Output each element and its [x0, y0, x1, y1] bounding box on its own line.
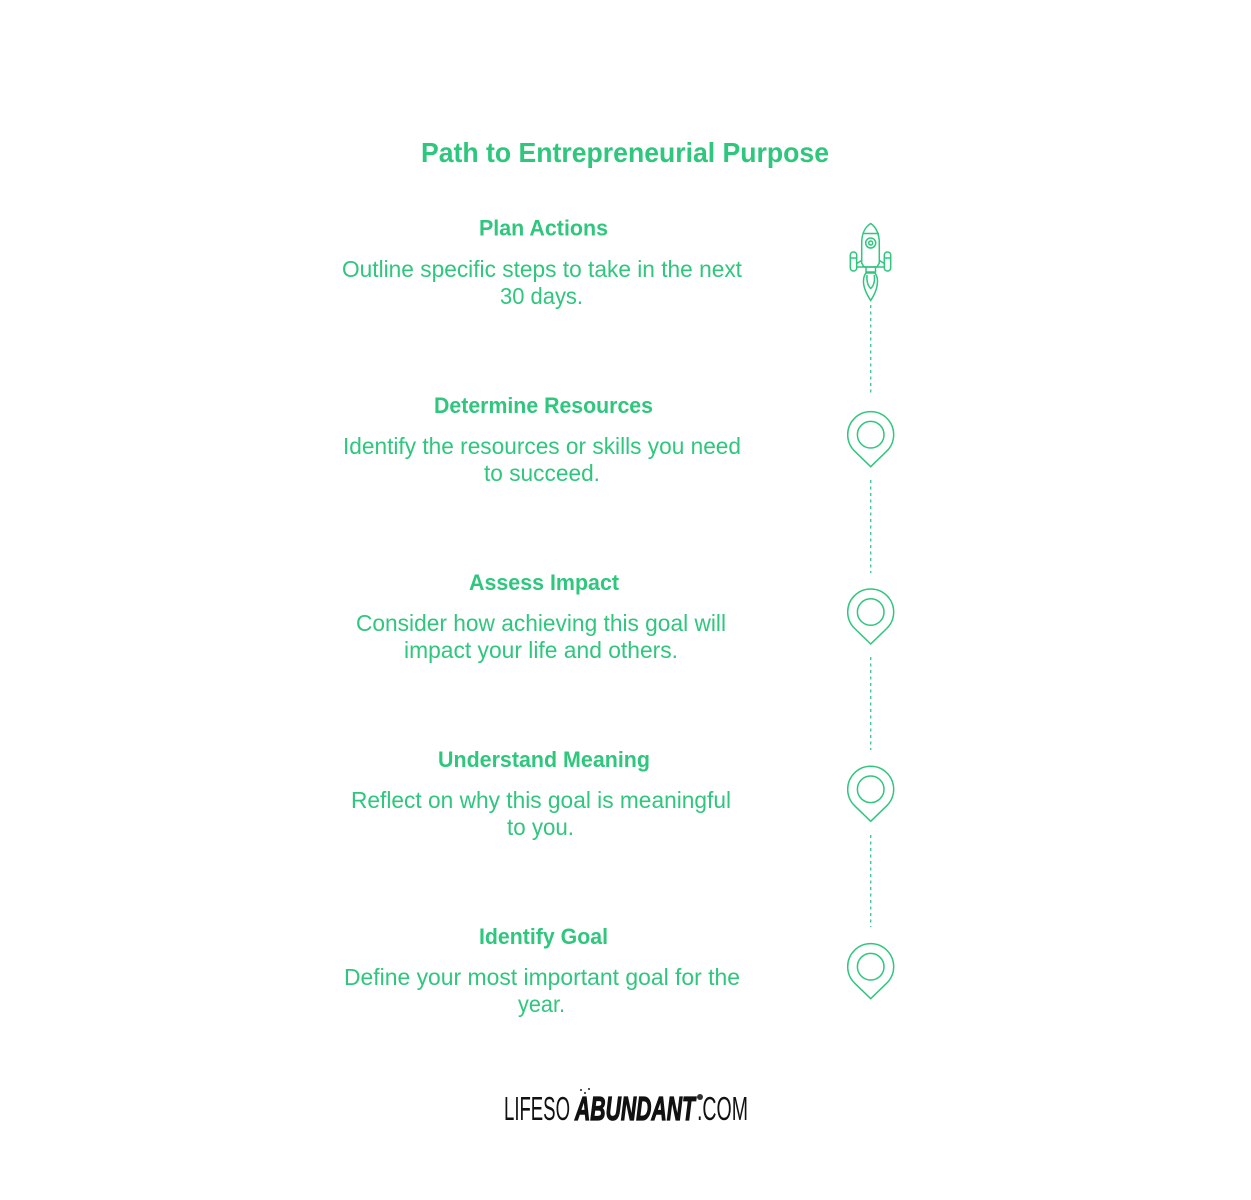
icon: rocket — [850, 224, 891, 300]
description: Identify Goal — [344, 964, 740, 1017]
description: Assess Impact: Consider how achieving this goal will — [356, 610, 726, 636]
logo: lifesoabundant.com: LIFESO — [504, 1090, 570, 1127]
connector: pin 2 to pin 3 — [870, 480, 872, 573]
heading: Assess Impact: Assess Impact — [469, 570, 619, 595]
step: Understand Meaning — [351, 747, 731, 840]
icon: pin 3 — [848, 589, 894, 644]
heading: Plan Actions: Plan Actions — [479, 216, 608, 240]
description: Assess Impact: impact your life and others. — [404, 637, 678, 663]
description: Determine Resources: to succeed. — [484, 460, 600, 486]
heading: Understand Meaning: Understand Meaning — [438, 747, 650, 772]
description: Determine Resources — [343, 433, 741, 486]
connector: rocket to pin 2 — [870, 305, 872, 396]
title: Path to Entrepreneurial Purpose — [421, 137, 829, 168]
description: Determine Resources: Identify the resources or skills you need — [343, 433, 741, 459]
description: Assess Impact — [356, 610, 726, 663]
description: Identify Goal: year. — [518, 991, 565, 1017]
heading: Identify Goal: Identify Goal — [479, 924, 608, 949]
step: Determine Resources — [343, 393, 741, 486]
icon: pin 5 — [848, 944, 894, 999]
logo: lifesoabundant.com: ABUNDANT — [574, 1090, 697, 1127]
description: Understand Meaning — [351, 787, 731, 840]
logo: lifesoabundant.com — [504, 1088, 748, 1127]
description: Plan Actions — [342, 256, 743, 309]
description: Plan Actions: 30 days. — [500, 283, 583, 309]
description: Understand Meaning: Reflect on why this goal is meaningful — [351, 787, 731, 813]
description: Identify Goal: Define your most important goal for the — [344, 964, 740, 990]
step: Assess Impact — [356, 570, 726, 663]
icon: pin 4 — [848, 766, 894, 821]
description: Plan Actions: Outline specific steps to take in the next — [342, 256, 743, 282]
step: Identify Goal — [344, 924, 740, 1017]
description: Understand Meaning: to you. — [507, 814, 574, 840]
heading: Determine Resources: Determine Resources — [434, 393, 653, 418]
connector: pin 3 to pin 4 — [870, 657, 872, 750]
icon: pin 2 — [848, 412, 894, 467]
logo: lifesoabundant.com: .COM — [697, 1090, 748, 1127]
connector: pin 4 to pin 5 — [870, 835, 872, 927]
step: Plan Actions — [342, 216, 743, 309]
